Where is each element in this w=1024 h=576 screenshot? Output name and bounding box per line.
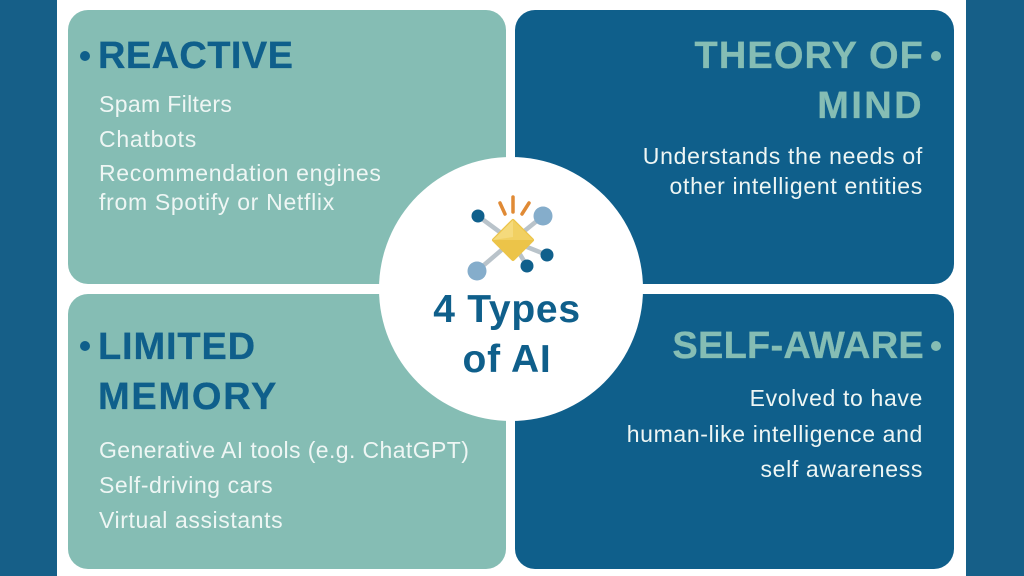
heading: reactive: REACTIVE [98, 35, 293, 77]
panel: reactive [68, 10, 506, 284]
icon: AI network diamond [468, 195, 554, 280]
self-driving cars: Self-driving cars [99, 472, 273, 498]
theory of mind description: Understands the needs of [643, 143, 923, 169]
self-aware description: Evolved to have [750, 385, 923, 411]
panel: self-aware [515, 294, 954, 569]
heading: limited memory: LIMITED [98, 326, 256, 368]
heading: theory of mind: THEORY OF [695, 35, 924, 77]
chatbots: Chatbots [99, 126, 197, 152]
center title: of AI [463, 338, 551, 381]
recommendation engines: Recommendation engines [99, 160, 382, 186]
generative AI: Generative AI tools (e.g. ChatGPT) [99, 437, 469, 463]
recommendation engines [99, 160, 382, 215]
virtual assistants: Virtual assistants [99, 507, 283, 533]
right background band [966, 0, 1024, 576]
center circle [379, 157, 643, 421]
self-aware description: self awareness [760, 456, 923, 482]
theory of mind description: other intelligent entities [670, 173, 923, 199]
heading: self-aware: SELF-AWARE [672, 325, 924, 367]
center title: 4 Types [433, 288, 581, 331]
panel: theory of mind [515, 10, 954, 284]
self-aware description: human-like intelligence and [627, 420, 923, 446]
recommendation engines: from Spotify or Netflix [99, 189, 335, 215]
heading: theory of mind [694, 35, 924, 127]
bullet [931, 51, 941, 61]
self-aware description [627, 385, 923, 482]
heading: theory of mind: MIND [817, 85, 924, 127]
bullet [931, 341, 941, 351]
bullet [80, 341, 90, 351]
theory of mind description [643, 143, 923, 199]
left background band [0, 0, 57, 576]
heading: limited memory: MEMORY [98, 376, 278, 418]
bullet [80, 51, 90, 61]
heading: limited memory [98, 326, 278, 418]
center title [433, 288, 581, 381]
reactive examples: Spam Filters [99, 91, 232, 117]
panel: limited memory [68, 294, 506, 569]
